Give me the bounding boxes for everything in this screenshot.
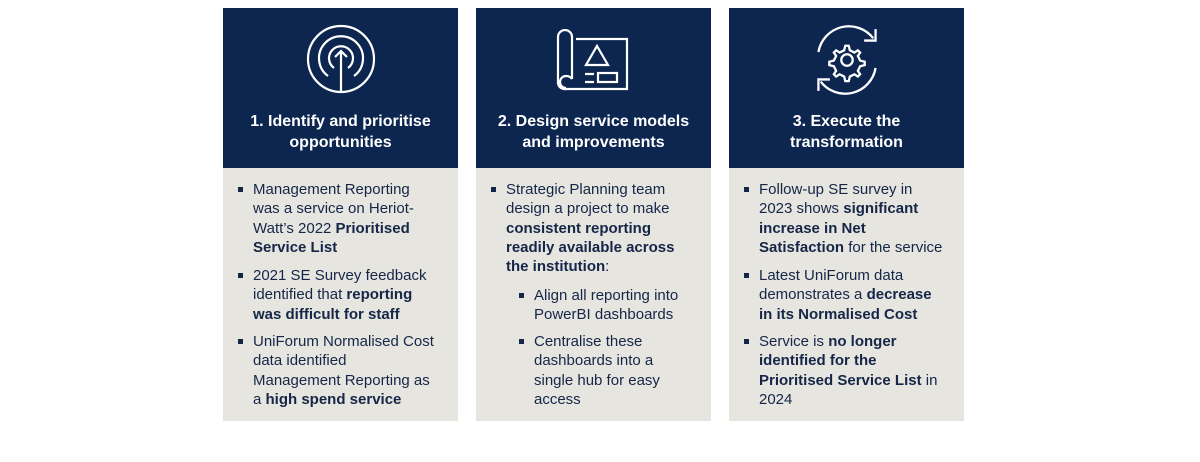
header: identify xyxy=(223,8,458,168)
title: 1. Identify and prioritise xyxy=(250,113,431,130)
body: execute bullets: demonstrates a decrease xyxy=(759,286,932,303)
header: execute xyxy=(729,8,964,168)
body: design bullets: dashboards into a xyxy=(534,352,653,369)
body: identify bullets: Service List xyxy=(253,239,337,256)
body: design bullets: single hub for easy xyxy=(534,372,660,389)
body: identify bullets: a high spend service xyxy=(253,391,401,408)
body: execute bullets: Prioritised Service List in xyxy=(759,372,937,389)
body: design bullets: the institution: xyxy=(506,258,609,275)
body: identify bullets: Watt’s 2022 Prioritised xyxy=(253,220,410,237)
body: identify bullets: UniForum Normalised Cost xyxy=(253,333,434,350)
title xyxy=(498,113,689,151)
body: identify bullets: identified that reporting xyxy=(253,286,412,303)
body: execute bullets: identified for the xyxy=(759,352,876,369)
body: execute bullets: 2023 shows significant xyxy=(759,200,918,217)
body: design bullets xyxy=(476,168,711,421)
panel: design xyxy=(476,8,711,421)
panel: execute xyxy=(729,8,964,421)
body: design bullets: PowerBI dashboards xyxy=(534,306,673,323)
body: execute bullets: Satisfaction for the service xyxy=(759,239,942,256)
body: execute bullets: 2024 xyxy=(759,391,792,408)
body: identify bullets: data identified xyxy=(253,352,346,369)
icon: target arrow xyxy=(306,24,376,94)
title: opportunities xyxy=(289,134,392,151)
panel: identify xyxy=(223,8,458,421)
body: identify bullets: 2021 SE Survey feedback xyxy=(253,267,426,284)
body: execute bullets: increase in Net xyxy=(759,220,866,237)
body: design bullets: Centralise these xyxy=(534,333,642,350)
body: execute bullets: Follow-up SE survey in xyxy=(759,181,912,198)
body: design bullets: design a project to make xyxy=(506,200,669,217)
body: execute bullets: Service is no longer xyxy=(759,333,897,350)
body: execute bullets: Latest UniForum data xyxy=(759,267,903,284)
body: design bullets: readily available across xyxy=(506,239,674,256)
title: 2. Design service models xyxy=(498,113,689,130)
body: identify bullets: Management Reporting xyxy=(253,181,410,198)
body: execute bullets xyxy=(729,168,964,421)
title xyxy=(250,113,431,151)
icon: blueprint xyxy=(556,29,628,90)
title xyxy=(790,113,903,151)
body: design bullets: consistent reporting xyxy=(506,220,651,237)
body: design bullets: Align all reporting into xyxy=(534,287,678,304)
title: transformation xyxy=(790,134,903,151)
body: execute bullets: in its Normalised Cost xyxy=(759,306,917,323)
title: 3. Execute the xyxy=(793,113,900,130)
body: design bullets: Strategic Planning team xyxy=(506,181,665,198)
icon: cycle gear xyxy=(817,25,877,95)
body: identify bullets: was difficult for staff xyxy=(253,306,400,323)
title: and improvements xyxy=(522,134,665,151)
body: identify bullets xyxy=(223,168,458,421)
body: identify bullets: was a service on Heriot- xyxy=(253,200,414,217)
body: identify bullets: Management Reporting as xyxy=(253,372,430,389)
header: design xyxy=(476,8,711,168)
body: design bullets: access xyxy=(534,391,581,408)
